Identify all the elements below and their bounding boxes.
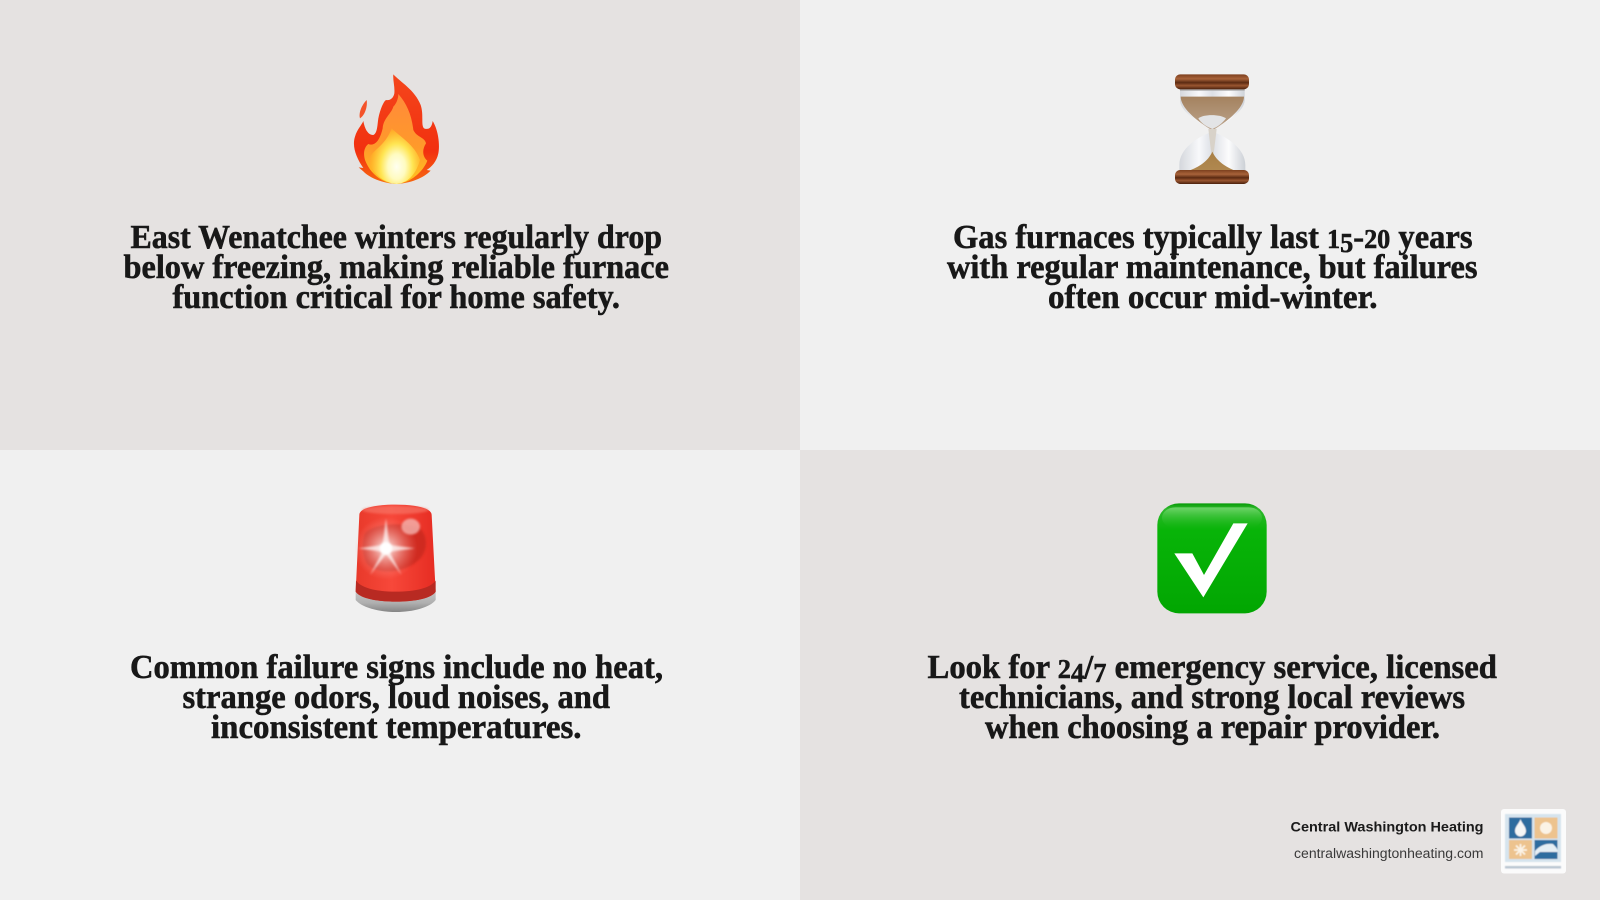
heading: failure signs statement: inconsistent temperatures. <box>211 709 582 746</box>
heading: provider statement: 4 <box>1071 658 1084 688</box>
icon: hourglass <box>1175 74 1249 184</box>
heading: lifespan statement: 5 <box>1340 228 1353 258</box>
heading: provider statement: / <box>1083 649 1094 686</box>
icon: check mark <box>1157 503 1267 613</box>
heading: provider statement: technicians, and strong local reviews <box>959 679 1465 716</box>
icon: fire <box>354 74 439 184</box>
heading: lifespan statement: Gas furnaces typically last 1 <box>953 219 1341 256</box>
heading: failure signs statement: strange odors, loud noises, and <box>182 679 610 716</box>
footer: website: centralwashingtonheating.com <box>1294 846 1484 861</box>
heading: provider statement: emergency service, licensed <box>1106 649 1497 686</box>
footer: company name: Central Washington Heating <box>1290 818 1484 834</box>
icon: company logo <box>1501 809 1566 874</box>
heading: winters statement: function critical for home safety. <box>172 279 620 316</box>
panel: failure signs (bottom left) <box>0 450 800 900</box>
icon: siren <box>354 505 436 612</box>
heading: lifespan statement: often occur mid-winter. <box>1048 279 1378 316</box>
heading: provider statement <box>928 649 1497 746</box>
heading: lifespan statement: - <box>1353 219 1364 256</box>
heading: lifespan statement: 20 years <box>1364 219 1475 256</box>
heading: winters statement: East Wenatchee winters regularly drop <box>130 219 662 256</box>
heading: lifespan statement: with regular maintenance, but failures <box>947 249 1478 286</box>
heading: provider statement: when choosing a repair provider. <box>985 709 1440 746</box>
heading: provider statement: Look for 2 <box>928 649 1071 686</box>
heading: winters statement: below freezing, making reliable furnace <box>124 249 669 286</box>
panel: winters (top left) <box>0 0 800 450</box>
heading: failure signs statement <box>130 649 663 746</box>
heading: lifespan statement <box>947 219 1478 316</box>
panel: choosing a provider (bottom right) <box>800 450 1600 900</box>
heading: failure signs statement: Common failure signs include no heat, <box>130 649 663 686</box>
panel: lifespan (top right) <box>800 0 1600 450</box>
heading: winters statement <box>124 219 669 316</box>
heading: provider statement: 7 <box>1093 658 1106 688</box>
